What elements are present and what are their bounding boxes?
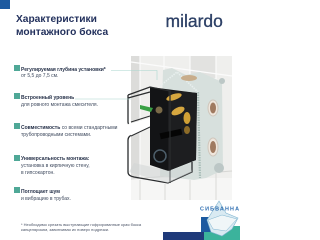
feature 1 [14,65,106,79]
feature text 3: Совместимость со всеми стандартными [21,125,117,131]
title: монтажного бокса [16,26,108,38]
black wire protective cover [128,87,192,183]
feature text 5 [21,189,71,202]
mounting frame [160,68,223,180]
feature text 4: в гипсокартон. [21,170,55,176]
brand badge: сибванна [163,201,240,240]
brand badge: сибванна: СИБВАННА [200,206,239,212]
footnote: канцелярским, завинчивая их поверх подрезки. [21,227,109,232]
feature text 5: Поглощает шум [21,189,60,195]
bullet marker 2 [14,93,20,99]
bullet marker 4 [14,155,20,161]
feature text 3: трубопроводными системами. [21,132,91,138]
feature text 4 [21,156,90,176]
title [16,14,108,38]
feature text 4: установка в кирпичную стену, [21,163,90,169]
feature 4 [14,155,90,176]
bullet marker 5 [14,187,20,193]
connector lines [75,70,157,99]
green spirit level [140,105,153,112]
footnote: * Необходимо срезать выступающие гофрированные края бокса [21,222,141,226]
feature text 1: от 5,5 до 7,5 см. [21,73,58,79]
black valve body [150,87,197,171]
corner accent block [0,0,10,9]
logo: milardo: milardo [166,11,223,31]
feature 5 [14,187,71,202]
feature text 2: для ровного монтажа смесителя. [21,102,98,108]
feature 2 [14,93,98,108]
feature text 4: Универсальность монтажа: [21,156,89,162]
bullet marker 3 [14,123,20,129]
feature text 5: и вибрацию в трубах. [21,196,71,202]
feature 3 [14,123,118,138]
feature text 1 [21,66,106,79]
title: Характеристики [16,14,97,25]
feature text 2 [21,95,98,108]
product photo: mounting box [75,56,240,240]
bullet marker 1 [14,65,20,71]
feature text 1: Регулируемая глубина установки* [21,66,106,72]
feature text 3 [21,125,118,138]
feature text 2: Встроенный уровень [21,95,74,101]
footnote [21,222,142,232]
